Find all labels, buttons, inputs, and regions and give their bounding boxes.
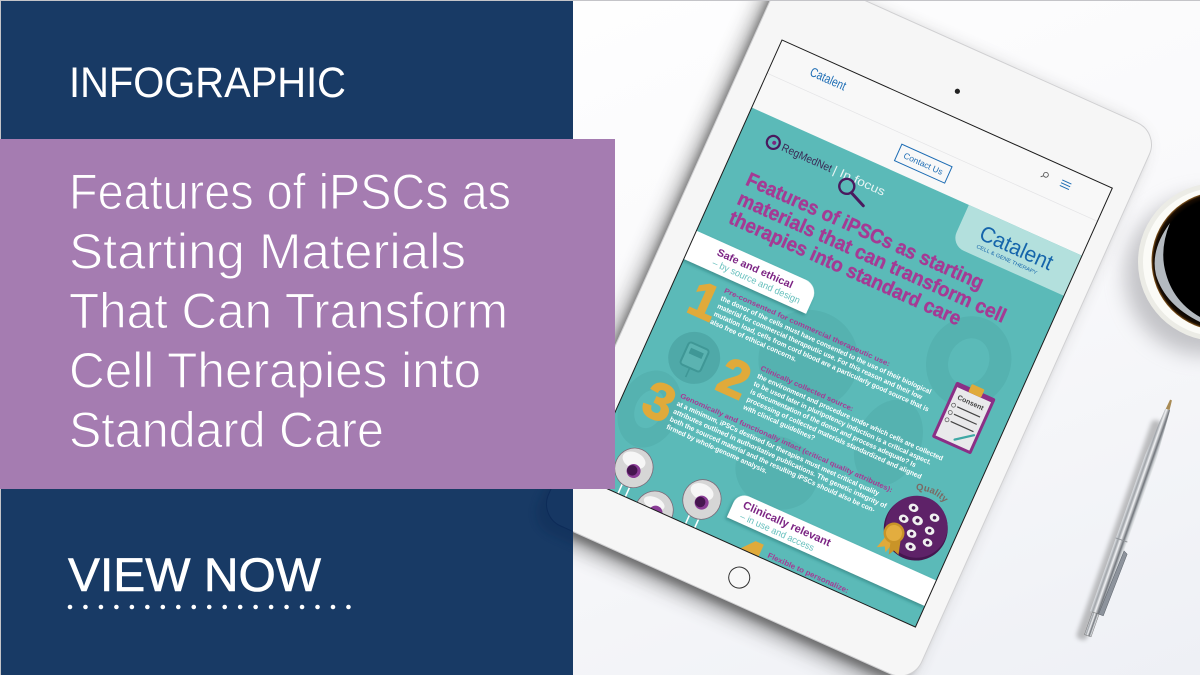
menu icon — [1060, 180, 1071, 190]
item 1 text: also free of ethical concerns. — [709, 319, 798, 364]
item 4 heading: Flexible to personalize: — [766, 551, 850, 595]
icon: rosette — [876, 522, 904, 555]
item 3 text: both the sourced material and the resulting iPSCs should also be con- — [668, 416, 876, 514]
item 3 text: firmed by whole-genome analysis. — [665, 424, 768, 475]
icon: consent clipboard — [932, 378, 997, 455]
headline: Features of iPSCs as — [69, 164, 511, 220]
catalent panel: Catalent — [976, 220, 1057, 275]
icon: consent clipboard: Consent — [956, 394, 985, 413]
catalent panel — [951, 205, 1082, 296]
item 2 text: with clinical guidelines? — [741, 404, 816, 442]
item 2 text: processing of collected materials standardized and aligned — [745, 396, 922, 481]
pen — [1075, 398, 1180, 641]
regmednet logo: RegMedNet — [780, 142, 834, 175]
catalent panel: CELL & GENE THERAPY — [975, 244, 1038, 277]
icon: quality plate: Quality — [916, 484, 948, 502]
search icon — [1040, 172, 1049, 178]
headline: Cell Therapies into — [69, 342, 481, 398]
item 2 text: to be used later in pluripotency induction is a critical aspect. — [752, 381, 932, 467]
screen — [609, 68, 1097, 626]
item 3 text: Genomically and functionally intact (critical quality attributes): — [679, 393, 893, 494]
banner: clinically relevant: – in use and access — [738, 511, 816, 554]
contact us button: Contact Us — [902, 150, 944, 177]
item 1 text: material for commercial therapeutic use. For this reason and their low — [716, 303, 924, 401]
label: infographic: INFOGRAPHIC — [69, 59, 346, 107]
panel: purple title — [0, 139, 615, 489]
item 3 text: attributes outlined in authoritative publications. The genetic integrity of — [672, 408, 888, 510]
icon: cell on stem left — [615, 448, 654, 497]
icon: cell on stem right — [682, 479, 722, 528]
banner: safe and ethical — [684, 231, 819, 314]
headline — [69, 164, 511, 458]
contact us button — [894, 144, 952, 183]
magnifier icon — [838, 178, 865, 208]
item 1 text: the donor of the cells must have consented to the use of their biological — [719, 295, 932, 396]
icon: blood bag — [668, 332, 720, 384]
item 1 text: Pre-consented for commercial therapeutic use: — [723, 288, 891, 368]
panel: navy — [0, 0, 573, 675]
icon: quality plate — [884, 484, 948, 560]
item 3 text: at a minimum, iPSCs destined for therapies must meet critical quality — [675, 401, 880, 498]
numeral 2: 2 — [709, 347, 759, 411]
page title: materials that can transform cell — [734, 188, 1009, 328]
item 2 text: Clinically collected source: — [759, 365, 854, 413]
headline: That Can Transform — [69, 283, 508, 339]
tablet shadow — [528, 0, 1150, 675]
tablet shadow through navy panel — [546, 489, 573, 532]
page title: Features of iPSCs as starting — [743, 169, 987, 295]
item 2 text: the environment and procedure under which cells are collected — [756, 373, 944, 463]
numeral 1: 1 — [680, 270, 728, 332]
numeral 3: 3 — [634, 370, 684, 435]
regmednet logo — [765, 133, 887, 199]
headline: Standard Care — [69, 402, 384, 458]
item 1 text: mutation load, cells from cord blood are a particularly good source that is — [712, 311, 930, 414]
home button — [725, 564, 753, 591]
camera — [954, 88, 961, 95]
banner: clinically relevant — [727, 492, 936, 606]
banner: clinically relevant: Clinically relevant — [741, 499, 833, 549]
regmednet logo: | In focus — [831, 163, 887, 199]
dotted underline — [70, 605, 349, 609]
page title: therapies into standard care — [725, 207, 964, 330]
banner: safe and ethical: Safe and ethical — [715, 247, 795, 291]
banner: safe and ethical: – by source and design — [711, 258, 802, 307]
call to action: VIEW NOW — [68, 548, 322, 601]
coffee cup — [1125, 183, 1200, 355]
numeral 4 — [740, 541, 764, 556]
item 2 text: is documentation of the donor and process adequate? Is — [749, 389, 917, 469]
catalent header logo: Catalent — [808, 64, 849, 94]
background cell shapes — [799, 328, 934, 498]
headline: Starting Materials — [69, 224, 466, 280]
tablet — [573, 1, 1152, 675]
icon: cell on stem middle — [637, 490, 674, 518]
teal page — [585, 108, 1082, 627]
